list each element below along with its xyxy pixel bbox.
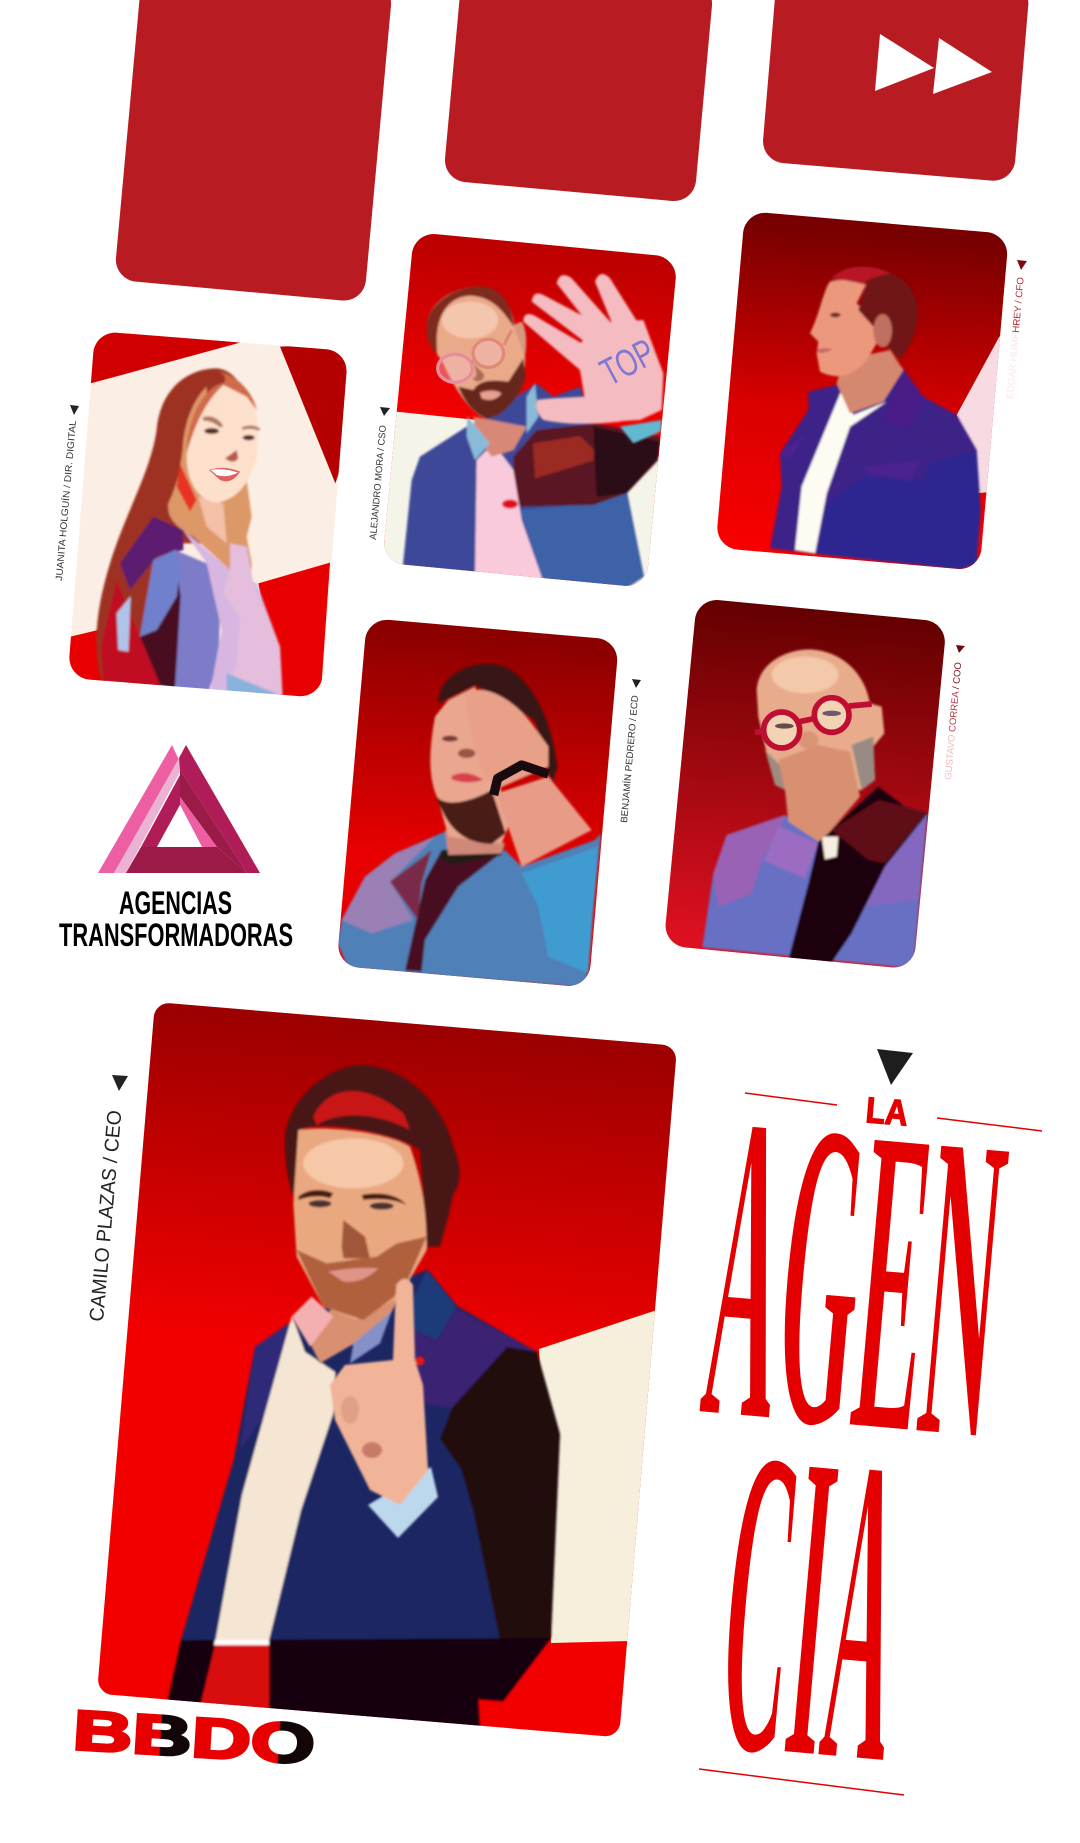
title word: LA: LA bbox=[864, 1089, 910, 1134]
panel: blank red card middle bbox=[443, 0, 714, 203]
icon: fast-forward arrows bbox=[875, 34, 992, 94]
panel: red card with fast-forward icon bbox=[761, 0, 1030, 182]
text: logo wordmark: TRANSFORMADORAS bbox=[59, 917, 293, 953]
icon: glasses bbox=[438, 330, 512, 382]
caption: Camilo Plazas: CAMILO PLAZAS / CEO bbox=[86, 1109, 126, 1322]
icon: caption pointer bbox=[380, 407, 390, 416]
caption: Gustavo Correa: GUSTAVO CORREA / COO bbox=[943, 662, 964, 780]
panel: portrait Alejandro Mora bbox=[380, 230, 683, 600]
icon: caption pointer bbox=[632, 679, 641, 688]
panel: portrait Gustavo Correa bbox=[665, 597, 958, 977]
text: logo wordmark: AGENCIAS bbox=[119, 885, 232, 921]
icon: caption pointer bbox=[956, 645, 965, 653]
icon: title pointer bbox=[877, 1049, 913, 1085]
icon: round red glasses bbox=[755, 698, 872, 748]
caption: Juanita Holguin: JUANITA HOLGUÍN / DIR. DIGITAL bbox=[54, 420, 79, 581]
icon: triangle mark bbox=[98, 745, 260, 873]
title: La Agencia bbox=[690, 1021, 1042, 1843]
icon: wristband bbox=[494, 765, 548, 795]
portrait raised hand bbox=[330, 1278, 438, 1538]
logo: BBDO: BBDO bbox=[71, 1698, 317, 1776]
logo: Agencias Transformadoras bbox=[59, 745, 293, 953]
icon: caption pointer bbox=[70, 405, 79, 415]
panel: blank red card left bbox=[114, 0, 393, 302]
title word: AGEN: AGEN bbox=[690, 1021, 1020, 1534]
title rule right bbox=[937, 1118, 1042, 1131]
panel: portrait Juanita Holguin bbox=[69, 332, 347, 696]
portrait head bbox=[285, 1065, 460, 1363]
text: logo wordmark bbox=[59, 885, 293, 953]
hand lettering: TOP: TOP bbox=[593, 331, 662, 395]
portrait body bbox=[165, 1270, 560, 1735]
panel: portrait Benjamin Pedrero bbox=[335, 617, 628, 990]
title rule bottom bbox=[699, 1769, 904, 1795]
caption: Benjamin Pedrero: BENJAMÍN PEDRERO / ECD bbox=[619, 695, 641, 823]
caption: Edgar Humphrey: EDGAR HUMPHREY / CFO bbox=[1005, 277, 1027, 399]
panel: portrait Edgar Humphrey bbox=[710, 210, 1013, 577]
icon: caption pointer bbox=[112, 1075, 128, 1091]
icon: caption pointer bbox=[1017, 260, 1027, 270]
title rule left bbox=[745, 1093, 837, 1105]
caption: Alejandro Mora: ALEJANDRO MORA / CSO bbox=[368, 425, 389, 540]
panel: portrait Camilo Plazas bbox=[80, 990, 690, 1760]
